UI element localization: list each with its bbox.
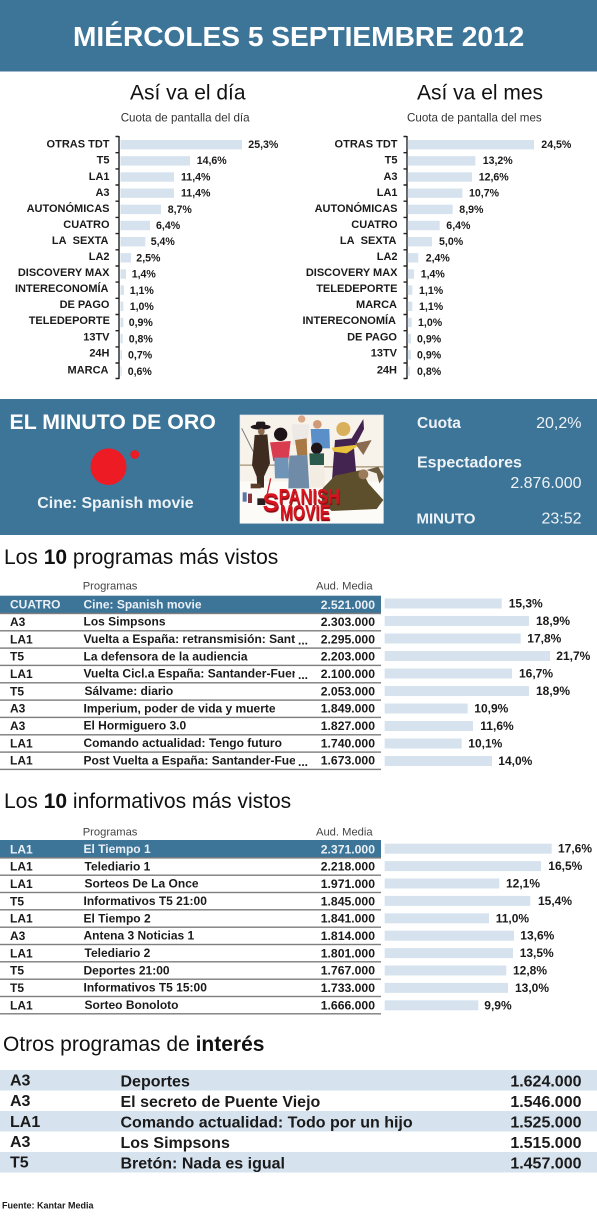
bar chart: mes: 2,4%: [426, 252, 450, 264]
bar chart: cuota programas: 10,1%: [468, 736, 503, 750]
table rows: A3: [10, 615, 26, 629]
bar chart: mes: A3: [383, 171, 398, 183]
heading: los 10 informativos: Los 10 informativos más vistos: [4, 790, 291, 813]
bar chart: mes: DISCOVERY MAX: [306, 267, 398, 279]
row: deportes: Deportes: [120, 1074, 190, 1090]
bar chart: día: LA2: [89, 251, 110, 263]
bar chart: cuota informativos: 13,0%: [515, 981, 549, 995]
bar chart: mes: 13,2%: [483, 155, 513, 167]
panel: así va el mes: [302, 81, 572, 379]
panel: el minuto de oro: [0, 399, 597, 535]
table rows: 2.203.000: [321, 650, 375, 664]
bar chart: cuota informativos: 16,5%: [548, 859, 583, 873]
table rows: LA1: [10, 946, 33, 960]
row: bretón: 1.457.000: [510, 1156, 582, 1172]
axis: mes: [404, 136, 407, 379]
row: deportes: [10, 1072, 582, 1090]
bar chart: cuota programas: 14,0%: [498, 754, 533, 768]
table rows: 2.053.000: [321, 684, 375, 698]
bar chart: cuota programas: 15,3%: [509, 596, 543, 610]
table rows: 1.814.000: [321, 929, 375, 943]
figure: woman in red: [266, 428, 291, 500]
heading: así va el día: Así va el día: [130, 81, 246, 104]
poster title: [263, 484, 340, 524]
bar chart: cuota informativos: [385, 842, 592, 1012]
bar chart: mes: LA SEXTA: [340, 235, 397, 247]
programme name: Cine: Spanish movie: [37, 495, 194, 512]
bar chart: mes: MARCA: [356, 299, 397, 311]
table rows: 1.740.000: [321, 736, 375, 750]
figure: small toys: [243, 492, 252, 503]
bar chart: mes: 12,6%: [479, 171, 509, 183]
bar chart: día: 0,7%: [128, 350, 153, 362]
table rows: [10, 597, 375, 769]
bar chart: día: 25,3%: [248, 139, 279, 151]
poster: spanish movie: [240, 415, 384, 524]
bar chart: día: 1,4%: [132, 269, 156, 281]
bar chart: día: 1,0%: [130, 301, 154, 313]
table rows: Informativos T5 21:00: [84, 894, 207, 908]
table rows: T5: [10, 684, 24, 698]
figure: doctor: [292, 415, 309, 445]
bar chart: cuota programas: 11,6%: [480, 719, 514, 733]
table rows: ...: [298, 668, 308, 682]
table rows: T5: [10, 981, 24, 995]
bar chart: día: 0,6%: [128, 366, 152, 378]
subheading: cuota del mes: Cuota de pantalla del mes: [407, 112, 542, 125]
row: bretón: [10, 1154, 582, 1172]
table rows: CUATRO: [10, 597, 60, 611]
bar chart: mes: AUTONÓMICAS: [315, 202, 398, 215]
row: los simpsons: A3: [10, 1134, 31, 1151]
bar chart: día: MARCA: [68, 364, 109, 376]
bar chart: día: [15, 139, 279, 378]
subheading: cuota del día: Cuota de pantalla del día: [121, 112, 250, 125]
bar chart: mes: OTRAS TDT: [335, 139, 398, 151]
table rows: El Tiempo 2: [84, 911, 151, 925]
bar chart: cuota programas: [385, 596, 591, 768]
bar chart: cuota programas: 18,9%: [536, 614, 570, 628]
bar chart: día: CUATRO: [63, 219, 110, 231]
heading: los 10 programas: Los 10 programas más vistos: [4, 546, 278, 569]
figure: horse mask: [288, 438, 309, 488]
table rows: [10, 842, 375, 1012]
row: el secreto de puente viejo: A3: [10, 1093, 31, 1110]
bar chart: mes: 1,1%: [419, 285, 444, 297]
row: el secreto de puente viejo: [10, 1093, 582, 1111]
bar chart: mes: INTERECONOMÍA: [302, 314, 396, 327]
table rows: Antena 3 Noticias 1: [84, 929, 195, 943]
bar chart: día: 0,9%: [129, 317, 153, 329]
column headers: Aud. Media: [316, 580, 373, 592]
table rows: T5: [10, 894, 24, 908]
bar chart: cuota informativos: 9,9%: [484, 998, 512, 1012]
table rows: LA1: [10, 632, 33, 646]
table rows: LA1: [10, 667, 33, 681]
row: comando actualidad: 1.525.000: [510, 1114, 582, 1132]
bar chart: día: 1,1%: [130, 285, 154, 297]
table rows: 1.827.000: [321, 719, 375, 733]
table rows: Telediario 1: [84, 859, 151, 873]
bar chart: día: TELEDEPORTE: [29, 315, 110, 327]
table rows: 1.849.000: [321, 702, 375, 716]
column headers: Programas: [83, 826, 138, 838]
table rows: 2.521.000: [321, 598, 375, 612]
bar chart: cuota informativos: 13,5%: [520, 946, 554, 960]
highlighted row: [0, 840, 381, 858]
row: bretón: T5: [10, 1154, 29, 1172]
bar chart: día: 5,4%: [151, 236, 175, 248]
bar chart: mes: 24,5%: [541, 139, 572, 151]
row: el secreto de puente viejo: El secreto de Puente Viejo: [120, 1094, 321, 1111]
table rows: 1.673.000: [321, 754, 375, 768]
bar chart: cuota informativos: 12,1%: [506, 876, 540, 890]
panel: así va el día: [15, 81, 279, 379]
stat: espectadores: Espectadores: [417, 455, 522, 472]
row: comando actualidad: Comando actualidad: Todo por un hijo: [120, 1114, 413, 1132]
row: bretón: Bretón: Nada es igual: [120, 1156, 285, 1172]
row: los simpsons: Los Simpsons: [120, 1135, 230, 1152]
table rows: ...: [298, 634, 308, 648]
title banner: [0, 0, 597, 72]
table rows: La defensora de la audiencia: [84, 649, 248, 663]
stat: minuto: [416, 511, 582, 528]
table rows: El Tiempo 1: [84, 842, 151, 856]
table rows: El Hormiguero 3.0: [84, 719, 187, 733]
table rows: 1.845.000: [321, 894, 375, 908]
table rows: 1.841.000: [321, 912, 375, 926]
bar chart: cuota programas: 21,7%: [556, 649, 591, 663]
table rows: Telediario 2: [84, 946, 151, 960]
table rows: T5: [10, 964, 24, 978]
bar chart: cuota informativos: 12,8%: [513, 964, 547, 978]
row: deportes: A3: [10, 1072, 31, 1090]
table rows: Post Vuelta a España: Santander-Fuente: [84, 753, 314, 767]
table rows: Deportes 21:00: [84, 963, 170, 977]
bar chart: cuota programas: 16,7%: [519, 666, 553, 680]
bar chart: día: INTERECONOMÍA: [15, 282, 109, 295]
stat: cuota: Cuota: [417, 415, 461, 432]
bar chart: día: 6,4%: [156, 220, 181, 232]
bar chart: día: 11,4%: [181, 171, 211, 183]
table rows: Sorteo Bonoloto: [84, 998, 178, 1012]
panel: tabla programas: [0, 580, 591, 770]
column headers: Aud. Media: [316, 826, 373, 838]
figure: girl in green: [309, 443, 325, 488]
table rows: Sorteos De La Once: [84, 877, 199, 891]
bar chart: mes: 1,4%: [421, 269, 445, 281]
bar chart: mes: 6,4%: [446, 220, 471, 232]
table rows: 1.733.000: [321, 981, 375, 995]
table rows: A3: [10, 702, 26, 716]
table rows: LA1: [10, 912, 33, 926]
bar chart: mes: CUATRO: [351, 219, 398, 231]
row: el secreto de puente viejo: 1.546.000: [510, 1094, 582, 1111]
bar chart: mes: 1,0%: [418, 317, 443, 329]
table rows: T5: [10, 650, 24, 664]
table rows: ...: [298, 755, 308, 769]
table rows: LA1: [10, 736, 33, 750]
stat: espectadores: 2.876.000: [510, 475, 582, 492]
table rows: Los Simpsons: [84, 615, 166, 629]
row: deportes: 1.624.000: [510, 1074, 582, 1090]
row bands: [0, 1070, 597, 1172]
heading: otros programas: Otros programas de interés: [3, 1033, 264, 1056]
table rows: 1.971.000: [321, 877, 375, 891]
bar chart: mes: 5,0%: [439, 236, 464, 248]
bar chart: mes: DE PAGO: [347, 331, 397, 343]
bar chart: cuota informativos: 17,6%: [558, 842, 592, 856]
poster title: PANISH: [279, 484, 340, 508]
table rows: Cine: Spanish movie: [84, 597, 202, 611]
stat: espectadores: [417, 455, 582, 492]
table rows: A3: [10, 719, 26, 733]
row: comando actualidad: LA1: [10, 1114, 40, 1131]
table rows: Comando actualidad: Tengo futuro: [84, 736, 282, 750]
row: los simpsons: 1.515.000: [510, 1135, 582, 1152]
bar chart: mes: 0,8%: [417, 366, 442, 378]
stat: minuto: MINUTO: [416, 511, 476, 528]
bar chart: día: DISCOVERY MAX: [18, 267, 110, 279]
bar chart: día: 8,7%: [168, 204, 192, 216]
bar chart: día: 13TV: [83, 331, 110, 343]
bar chart: mes: TELEDEPORTE: [316, 283, 398, 295]
bar chart: día: 24H: [89, 347, 110, 359]
bar chart: día: 14,6%: [197, 155, 227, 167]
figure: woman in purple: [332, 419, 372, 485]
axis: día: [116, 136, 119, 379]
stat: cuota: [417, 415, 582, 432]
bar chart: cuota informativos: 13,6%: [520, 929, 555, 943]
bar chart: cuota programas: 17,8%: [527, 632, 562, 646]
bar chart: mes: 8,9%: [459, 204, 484, 216]
table rows: Imperium, poder de vida y muerte: [84, 701, 276, 715]
bar chart: día: OTRAS TDT: [47, 139, 110, 151]
bar chart: día: AUTONÓMICAS: [27, 202, 110, 215]
figure: blue man: [311, 420, 330, 448]
bar chart: día: 0,8%: [129, 333, 153, 345]
bar chart: día: DE PAGO: [60, 299, 110, 311]
table rows: LA1: [10, 842, 33, 856]
bar chart: mes: 24H: [377, 364, 397, 376]
table rows: Vuelta Cicl.a España: Santander-Fuente: [84, 667, 310, 681]
bar chart: mes: LA1: [377, 187, 398, 199]
column headers: [83, 826, 373, 838]
bar chart: mes: T5: [385, 155, 398, 167]
column headers: Programas: [83, 580, 138, 592]
table rows: 1.767.000: [321, 964, 375, 978]
bar chart: día: LA SEXTA: [52, 235, 109, 247]
row: comando actualidad: [10, 1114, 582, 1132]
title banner: MIÉRCOLES 5 SEPTIEMBRE 2012: [73, 21, 524, 52]
bar chart: cuota informativos: 11,0%: [496, 911, 529, 925]
table rows: 2.100.000: [321, 667, 375, 681]
bar chart: día: 11,4%: [181, 188, 211, 200]
panel: tabla informativos: [0, 826, 592, 1014]
table rows: 2.303.000: [321, 615, 375, 629]
bar chart: día: LA1: [89, 171, 110, 183]
source note: Fuente: Kantar Media: [2, 1200, 95, 1210]
panel: otros programas table: [0, 1070, 597, 1172]
table rows: 2.218.000: [321, 860, 375, 874]
table rows: 2.371.000: [321, 842, 375, 856]
bar chart: mes: 0,9%: [417, 350, 442, 362]
highlighted row: [0, 596, 381, 613]
table rows: Vuelta a España: retransmisión: Santander-Fuente: [84, 632, 371, 646]
bar chart: día: 2,5%: [136, 252, 161, 264]
bar chart: mes: 0,9%: [417, 333, 442, 345]
poster title: MOVIE: [280, 500, 330, 524]
table rows: Informativos T5 15:00: [84, 981, 207, 995]
table rows: A3: [10, 929, 26, 943]
bar chart: mes: 13TV: [371, 347, 398, 359]
stat: minuto: 23:52: [541, 511, 582, 528]
table rows: 1.666.000: [321, 998, 375, 1012]
column headers: [83, 580, 373, 592]
bar chart: día: T5: [97, 155, 110, 167]
stat: cuota: 20,2%: [536, 415, 582, 432]
table rows: Sálvame: diario: [84, 684, 173, 698]
bar chart: cuota programas: 18,9%: [536, 684, 570, 698]
bar chart: cuota informativos: 15,4%: [538, 894, 572, 908]
bar chart: mes: 10,7%: [469, 188, 500, 200]
row lines: [0, 613, 381, 770]
row: los simpsons: [10, 1134, 582, 1152]
table rows: 2.295.000: [321, 632, 375, 646]
figure: creature: [322, 467, 384, 511]
table rows: LA1: [10, 998, 33, 1012]
row lines: [0, 857, 381, 1014]
figure: man in black: [242, 422, 271, 505]
bar chart: mes: LA2: [377, 251, 398, 263]
bar chart: mes: 1,1%: [419, 301, 444, 313]
table rows: LA1: [10, 754, 33, 768]
table rows: 1.801.000: [321, 946, 375, 960]
bar chart: día: A3: [95, 187, 110, 199]
table rows: LA1: [10, 860, 33, 874]
heading: así va el mes: Así va el mes: [417, 81, 543, 104]
icon: la 1 logo: [90, 448, 139, 485]
heading: el minuto de oro: EL MINUTO DE ORO: [10, 410, 216, 434]
table rows: LA1: [10, 877, 33, 891]
bar chart: cuota programas: 10,9%: [474, 702, 509, 716]
poster title: S: [263, 490, 279, 517]
bar chart: mes: [302, 139, 572, 378]
